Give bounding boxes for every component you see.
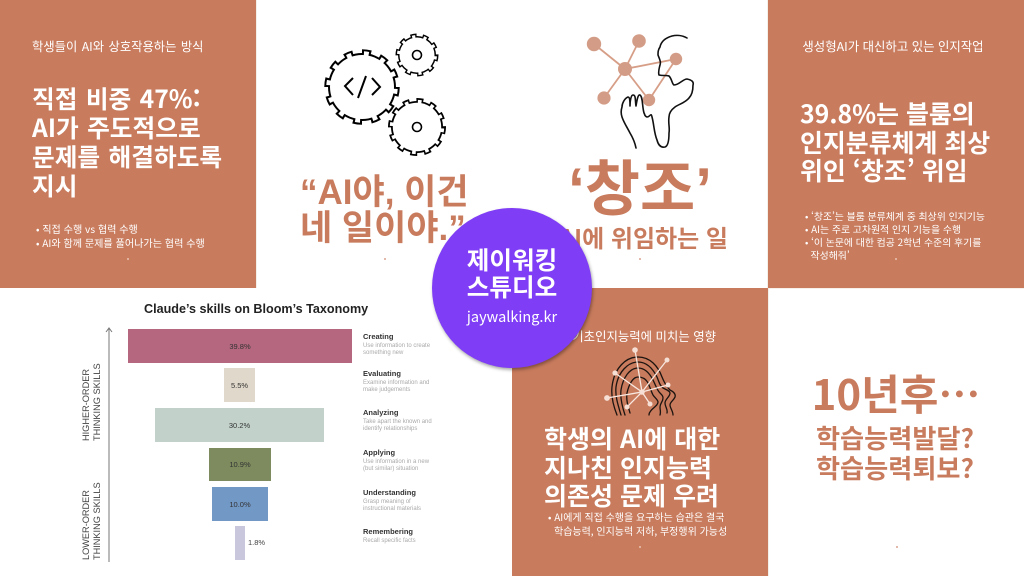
icon: head with radiating nodes <box>604 347 676 416</box>
bullet list: creation: • AI는 주로 고차원적 인지 기능을 수행 <box>805 222 961 236</box>
bar: evaluating: 5.5% <box>231 380 248 390</box>
legend: evaluating: Examine information and <box>363 380 429 386</box>
legend: analyzing: identify relationships <box>363 426 417 432</box>
legend: creating: Creating <box>363 332 393 341</box>
bar: creating <box>128 329 352 363</box>
question text: 학습능력발달? <box>816 418 974 456</box>
axis label: lower-order: THINKING SKILLS <box>92 482 102 560</box>
title: 39.8 percent: 위인 ‘창조’ 위임 <box>800 152 968 188</box>
gear: small <box>398 36 436 74</box>
bar: evaluating <box>224 368 255 402</box>
bar: remembering <box>235 526 245 560</box>
panel: Bloom's taxonomy chart <box>0 288 512 576</box>
bullet: habit: 학습능력, 인지능력 저하, 부정행위 가능성 <box>554 522 727 538</box>
quote text: 네 일이야.” <box>300 209 466 248</box>
title: direct share 47%: 지시 <box>32 167 77 203</box>
value: remembering: 1.8% <box>248 538 265 547</box>
panel: ten years later <box>768 288 1024 576</box>
legend: evaluating <box>363 369 429 393</box>
question text: 학습능력퇴보? <box>816 448 974 486</box>
legend: applying: (but similar) situation <box>363 466 418 472</box>
page dot <box>639 546 641 548</box>
title: 39.8 percent: 39.8%는 블룸의 <box>800 95 975 131</box>
big text: ten years later: 10년후… <box>812 362 980 423</box>
chart title: Claude’s skills on Bloom’s Taxonomy <box>144 302 368 316</box>
axis label: lower-order <box>81 482 102 560</box>
badge title <box>467 241 557 304</box>
page dot <box>127 258 129 260</box>
legend: understanding <box>363 488 421 512</box>
subtitle: delegated to AI: AI에 위임하는 일 <box>559 219 728 254</box>
profile and hand outline <box>621 35 693 148</box>
axis label: higher-order: THINKING SKILLS <box>92 363 102 441</box>
legend: applying: Applying <box>363 448 395 457</box>
title: direct share 47%: AI가 주도적으로 <box>32 109 201 145</box>
badge: Jaywalking Studio circle <box>432 208 592 368</box>
legend: creating: something new <box>363 350 403 356</box>
title: 39.8 percent <box>800 95 990 188</box>
bar: understanding: 10.0% <box>229 500 251 508</box>
badge url: jaywalking.kr <box>467 306 557 327</box>
page dot <box>639 258 641 260</box>
heading: interaction: 학생들이 AI와 상호작용하는 방식 <box>32 37 203 55</box>
legend: evaluating: Evaluating <box>363 369 401 378</box>
icon: gears with code symbol <box>324 34 446 156</box>
legend: applying <box>363 448 429 472</box>
legend: applying: Use information in a new <box>363 459 429 465</box>
bullet list: creation: 작성해줘’ <box>811 248 850 262</box>
legend: understanding: instructional materials <box>363 506 421 512</box>
axis label: higher-order <box>81 363 102 441</box>
question text <box>816 418 974 486</box>
axis arrow <box>106 327 112 562</box>
legend: remembering <box>363 527 416 544</box>
legend: analyzing: Analyzing <box>363 408 398 417</box>
legend: remembering: Remembering <box>363 527 413 536</box>
legend: creating <box>363 332 430 356</box>
legend: creating: Use information to create <box>363 343 430 349</box>
bullet list: creation: • ‘이 논문에 대한 컴공 2학년 수준의 후기를 <box>805 235 981 249</box>
network links <box>594 41 676 100</box>
legend: analyzing <box>363 408 432 432</box>
badge title: 제이워킹 <box>467 241 557 277</box>
panel: this is your job <box>256 0 512 288</box>
bullet list: creation: • ‘창조’는 블룸 분류체계 중 최상위 인지기능 <box>805 209 985 223</box>
bullet: habit: • AI에게 직접 수행을 요구하는 습관은 결국 <box>548 509 724 524</box>
gear: large <box>328 53 396 121</box>
axis label: lower-order: LOWER-ORDER <box>81 490 91 560</box>
big word: creation: ‘창조’ <box>568 156 712 223</box>
title: over-reliance: 학생의 AI에 대한 <box>544 420 720 456</box>
title: over-reliance <box>544 420 720 513</box>
white network spokes <box>607 350 668 407</box>
page dot <box>895 258 897 260</box>
white network nodes <box>604 347 670 410</box>
bar: applying: 10.9% <box>229 460 251 469</box>
bullet list: direct vs collaborative: • AI와 함께 문제를 풀어나가는 협력 수행 <box>36 235 205 250</box>
quote text: “AI야, 이건 <box>300 173 469 212</box>
legend: understanding: Understanding <box>363 488 416 497</box>
quote text <box>300 173 469 248</box>
gear: medium <box>391 101 443 153</box>
bullet list: creation <box>805 209 985 262</box>
bullet list: direct vs collaborative <box>36 221 205 250</box>
title: direct share 47% <box>32 80 222 203</box>
title: 39.8 percent: 인지분류체계 최상 <box>800 124 990 160</box>
legend: remembering: Recall specific facts <box>363 538 416 544</box>
bullet: habit <box>548 509 727 538</box>
bar: analyzing <box>155 408 324 442</box>
legend: evaluating: make judgements <box>363 387 410 393</box>
network nodes <box>587 34 682 106</box>
title: over-reliance: 지나친 인지능력 <box>544 448 712 484</box>
panel: impact on cognition <box>512 288 768 576</box>
title: over-reliance: 의존성 문제 우려 <box>544 477 719 513</box>
legend: analyzing: Take apart the known and <box>363 419 432 425</box>
panel: creation delegated to AI <box>512 0 768 288</box>
axis label: higher-order: HIGHER-ORDER <box>81 369 91 441</box>
panel: cognitive tasks delegated <box>768 0 1024 288</box>
page dot <box>896 546 898 548</box>
heading: cognitive tasks: 생성형AI가 대신하고 있는 인지작업 <box>802 37 984 55</box>
legend: understanding: Grasp meaning of <box>363 499 411 505</box>
bar: analyzing: 30.2% <box>229 420 250 430</box>
badge title: 스튜디오 <box>467 268 557 304</box>
panel: how students interact with AI <box>0 0 256 288</box>
bar: applying <box>209 448 271 481</box>
hair and face lines <box>612 357 675 415</box>
icon: network and human profile <box>586 34 694 149</box>
title: direct share 47%: 직접 비중 47%: <box>32 80 201 116</box>
title: direct share 47%: 문제를 해결하도록 <box>32 138 222 174</box>
heading: impact on cognition: 기초인지능력에 미치는 영향 <box>572 327 716 345</box>
bullet list: direct vs collaborative: • 직접 수행 vs 협력 수행 <box>36 221 138 236</box>
bar: understanding <box>212 487 268 521</box>
bar: creating: 39.8% <box>229 342 251 350</box>
page dot <box>384 258 386 260</box>
